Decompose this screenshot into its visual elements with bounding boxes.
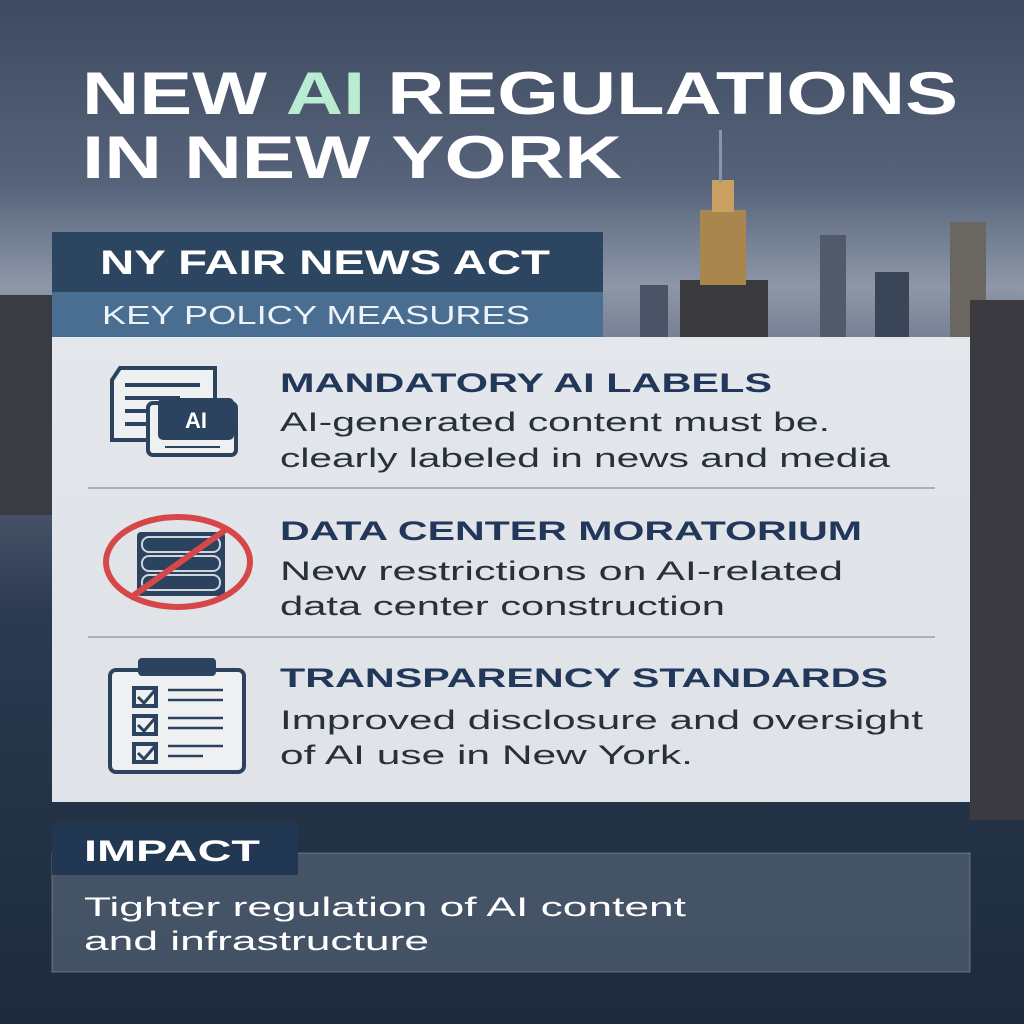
text: data center moratorium: DATA CENTER MORATORIUM: [280, 516, 862, 546]
impact box: [52, 823, 970, 972]
subheader: key policy measures: KEY POLICY MEASURES: [102, 300, 530, 330]
impact box: Tighter regulation of AI content: [84, 892, 687, 922]
icon: data center prohibited: [106, 517, 250, 607]
text: data center moratorium: data center construction: [280, 591, 725, 621]
header: NY Fair News Act: NY FAIR NEWS ACT: [100, 244, 550, 282]
text: data center moratorium: New restrictions on AI-related: [280, 556, 843, 586]
text: mandatory AI labels: AI-generated content must be.: [280, 407, 830, 437]
text: data center moratorium: [280, 516, 862, 621]
text: mandatory AI labels: MANDATORY AI LABELS: [280, 368, 772, 398]
title: NEW AI REGULATIONS: [82, 60, 958, 127]
text: transparency standards: TRANSPARENCY STANDARDS: [280, 663, 888, 693]
text: transparency standards: [280, 663, 924, 770]
impact box: and infrastructure: [84, 926, 429, 956]
text: mandatory AI labels: clearly labeled in news and media: [280, 443, 891, 473]
text: transparency standards: Improved disclosure and oversight: [280, 705, 924, 735]
icon: clipboard checklist: [110, 660, 244, 772]
header: NY Fair News Act: [52, 232, 603, 292]
impact box: IMPACT: [84, 835, 260, 868]
text: mandatory AI labels: [280, 368, 891, 473]
subheader: key policy measures: [52, 292, 603, 337]
title: [82, 60, 958, 191]
panel: policy measures: [52, 337, 970, 802]
icon: AI document: [112, 368, 236, 455]
title: IN NEW YORK: [82, 124, 622, 191]
text: transparency standards: of AI use in New York.: [280, 740, 693, 770]
panel: policy measures: AI: [185, 408, 207, 433]
